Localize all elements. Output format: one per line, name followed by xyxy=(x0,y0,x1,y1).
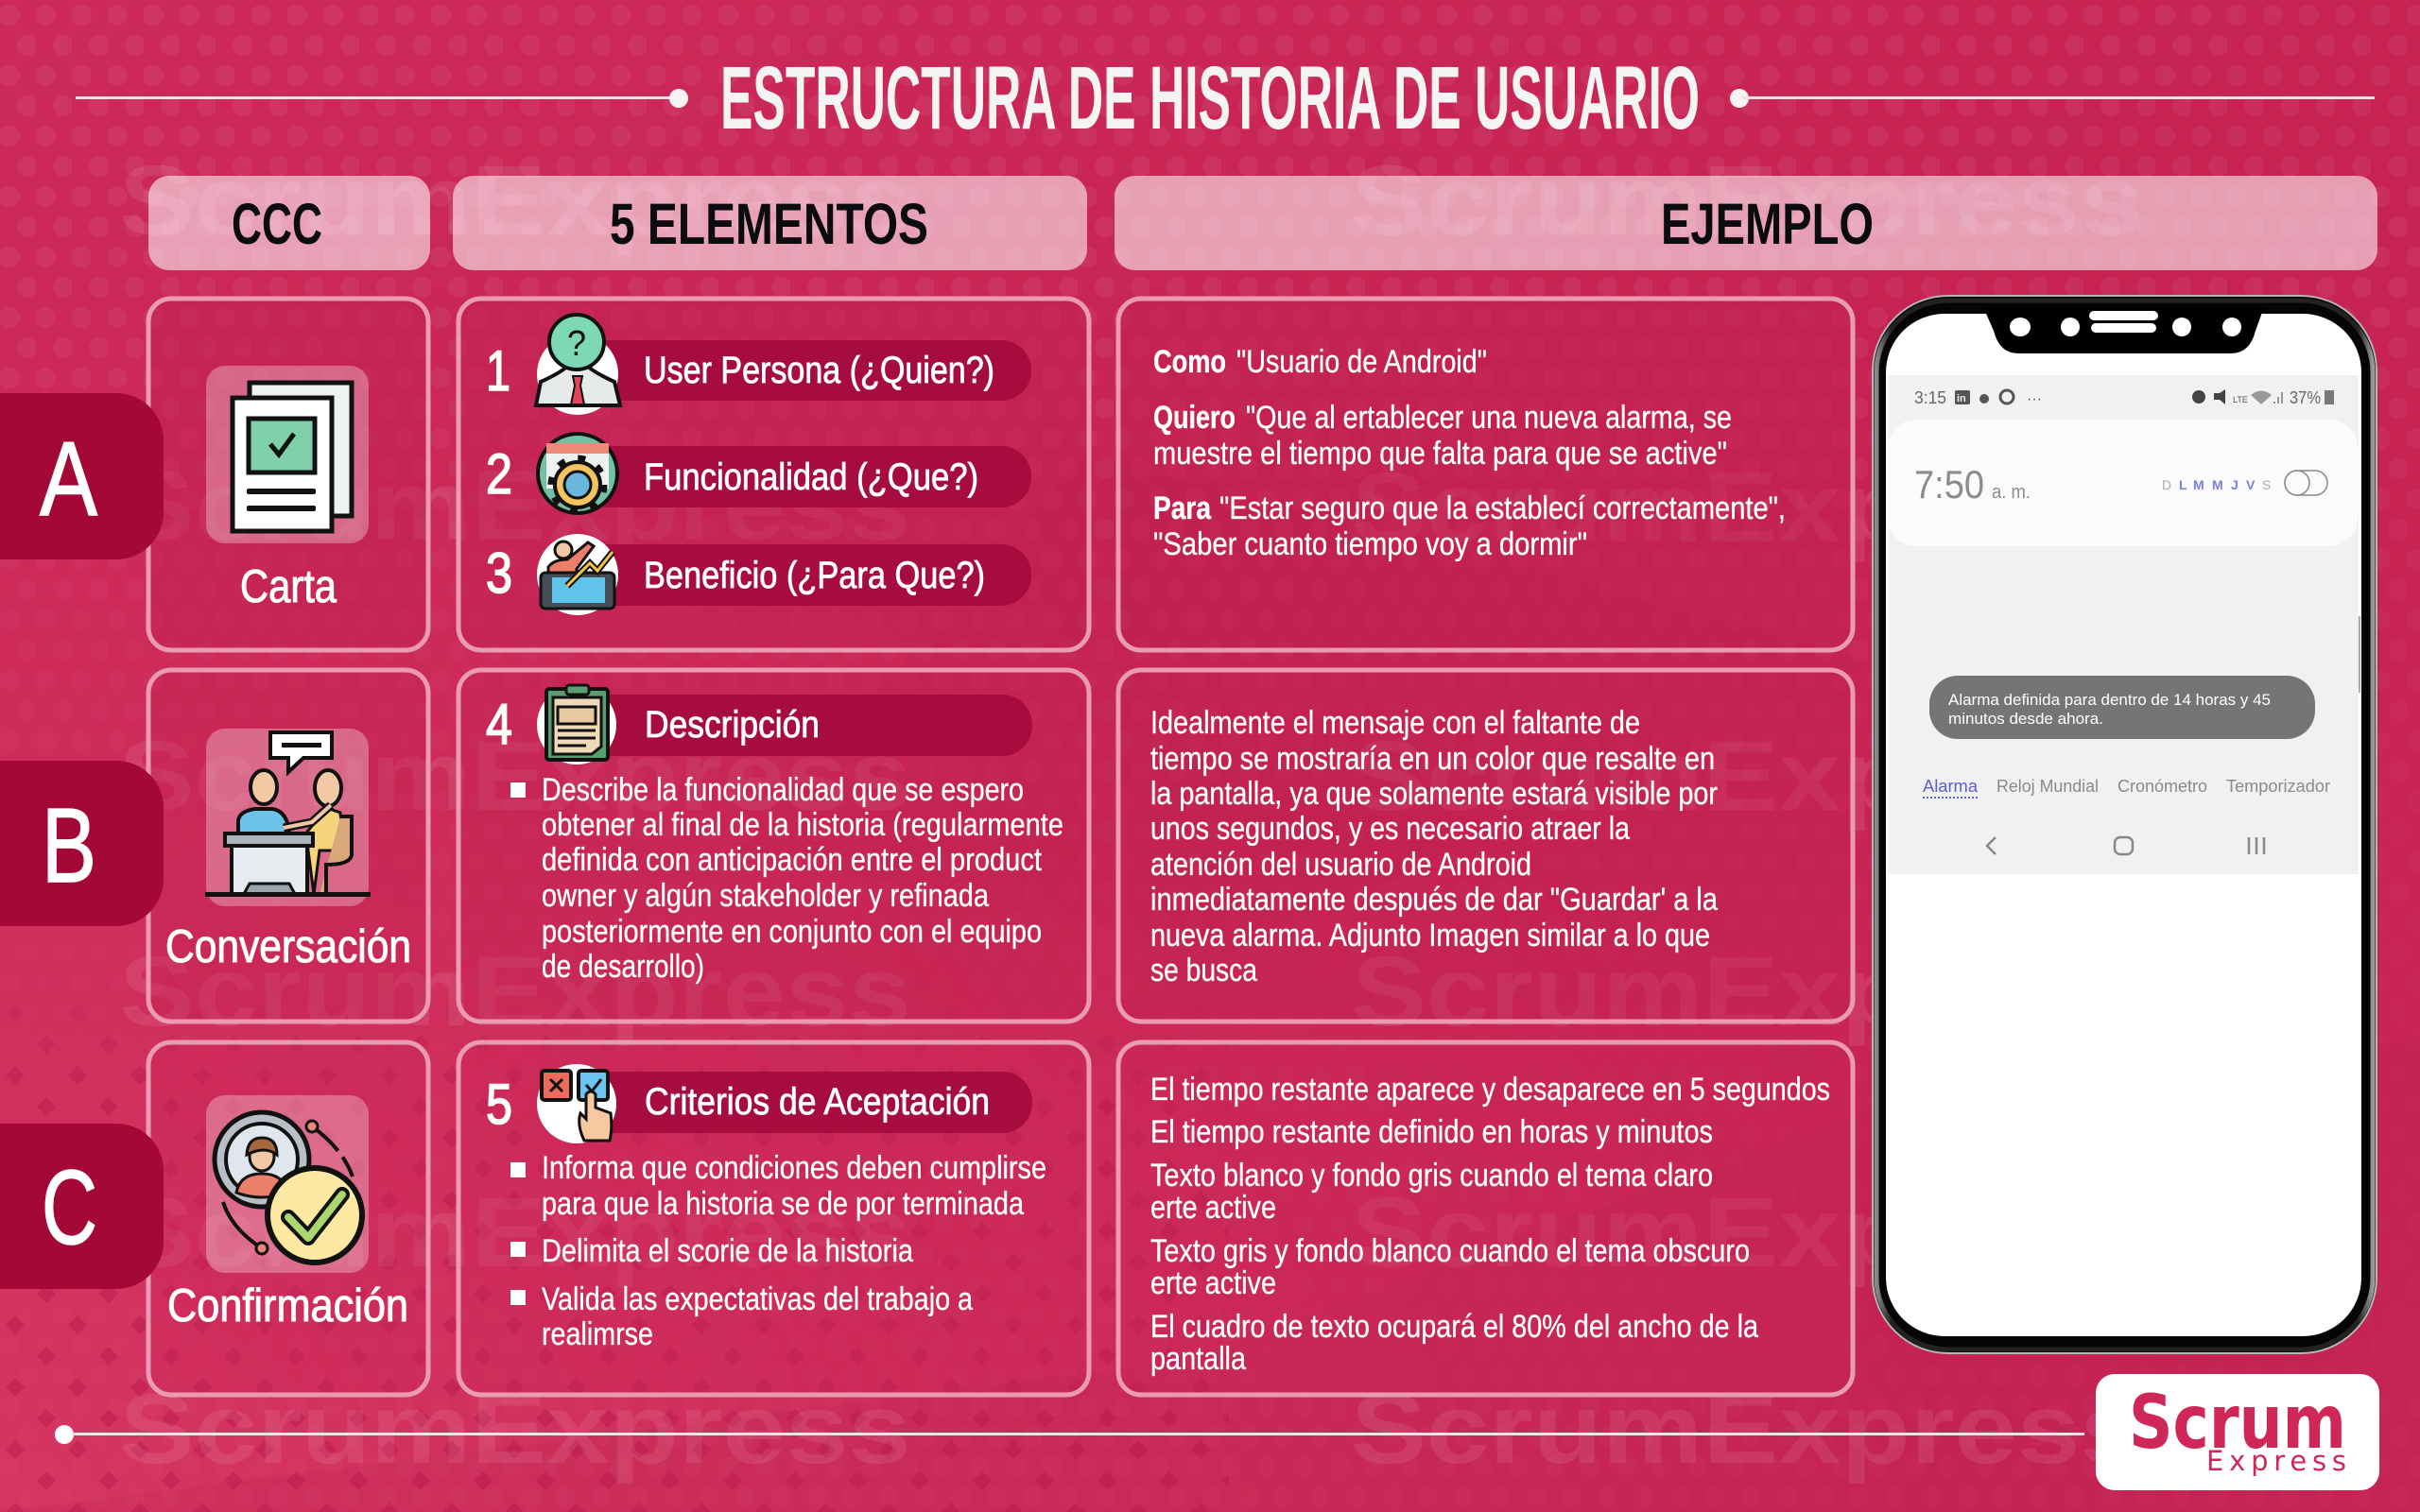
panel: Confirmacion xyxy=(148,1042,428,1395)
panel: elemento 5 criterios xyxy=(458,1042,1089,1395)
status bar: ··· xyxy=(2027,391,2042,407)
watermark text: ScrumExpress xyxy=(119,1177,911,1288)
clock tabs: Reloj Mundial xyxy=(1996,777,2099,796)
watermark text: ScrumExpress xyxy=(119,721,911,832)
element 3 beneficio: Beneficio (¿Para Que?) xyxy=(644,555,985,596)
watermark text: ScrumExpress xyxy=(119,451,911,561)
clock tabs: Temporizador xyxy=(2226,777,2330,796)
panel: elemento 4 descripcion xyxy=(458,670,1089,1022)
element 2 funcionalidad: Funcionalidad (¿Que?) xyxy=(644,456,978,498)
panel: elementos 1-3 xyxy=(458,299,1089,650)
alarm card: M xyxy=(2212,477,2223,492)
panel: ejemplo historia xyxy=(1118,299,1853,650)
element 4 description text: definida con anticipación entre el product xyxy=(542,842,1042,878)
alarm card: S xyxy=(2262,477,2271,492)
panel: ejemplo criterios: Texto blanco y fondo gris cuando el tema claro xyxy=(1150,1158,1713,1194)
alarm card xyxy=(1888,420,2358,546)
header: CCC: CCC xyxy=(232,192,322,256)
panel: ejemplo criterios: El tiempo restante definido en horas y minutos xyxy=(1150,1114,1713,1150)
element 2 funcionalidad: 2 xyxy=(486,442,512,506)
panel: ejemplo descripcion: nueva alarma. Adjunto Imagen similar a lo que xyxy=(1150,918,1710,954)
panel: ejemplo criterios: erte active xyxy=(1150,1190,1276,1226)
status bar xyxy=(1914,388,2334,407)
element 4 description text: Describe la funcionalidad que se espero xyxy=(542,772,1024,808)
watermark text: ScrumExpress xyxy=(119,146,911,256)
element 4 heading: Descripción xyxy=(645,704,820,746)
element 4 heading xyxy=(486,685,1032,765)
watermark text: ScrumExpress xyxy=(1351,721,2143,832)
logo: Scrum Express: Express xyxy=(2206,1445,2346,1477)
watermark text: ScrumExpress xyxy=(119,936,911,1047)
panel: ejemplo criterios: pantalla xyxy=(1150,1341,1246,1377)
watermark text: ScrumExpress xyxy=(1351,146,2143,256)
element 5 heading: 5 xyxy=(486,1073,512,1136)
element 1 user persona: ? xyxy=(567,324,586,364)
panel: ejemplo historia: "Saber cuanto tiempo voy a dormir" xyxy=(1153,526,1587,562)
element 2 funcionalidad xyxy=(486,434,1031,513)
watermark text: ScrumExpress xyxy=(1351,1374,2143,1485)
nav buttons xyxy=(1987,837,2264,854)
status bar: 37% xyxy=(2290,388,2321,407)
icon: confirmacion xyxy=(206,1095,369,1273)
header: ejemplo: EJEMPLO xyxy=(1661,192,1874,256)
element 5 bullets: para que la historia se de por terminada xyxy=(542,1186,1024,1222)
element 1 user persona xyxy=(486,315,1031,415)
panel: ejemplo criterios: Texto gris y fondo blanco cuando el tema obscuro xyxy=(1150,1233,1750,1269)
alarm card: 7:50 xyxy=(1914,462,1984,507)
side tab C xyxy=(0,1124,164,1289)
icon: carta xyxy=(206,366,369,543)
side tab A xyxy=(0,393,164,559)
phone notch xyxy=(1983,307,2264,353)
panel: ejemplo historia: Quiero xyxy=(1153,400,1236,436)
panel: ejemplo descripcion xyxy=(1118,670,1853,1022)
label: Carta: Carta xyxy=(240,561,337,612)
element 3 beneficio: 3 xyxy=(486,541,512,605)
element 5 bullets: Informa que condiciones deben cumplirse xyxy=(542,1150,1046,1186)
alarm card: M xyxy=(2193,477,2204,492)
watermark text: ScrumExpress xyxy=(1351,936,2143,1047)
status bar: 3:15 xyxy=(1914,388,1946,407)
status bar: LTE xyxy=(2233,395,2248,404)
icon: conversacion xyxy=(205,729,371,906)
phone screenshot xyxy=(1888,375,2360,874)
panel: ejemplo criterios: El tiempo restante aparece y desaparece en 5 segundos xyxy=(1150,1072,1830,1108)
element 4 heading: 4 xyxy=(486,693,512,756)
element 5 heading xyxy=(486,1064,1032,1143)
panel: ejemplo historia: Para xyxy=(1153,490,1212,526)
side tab B: B xyxy=(42,787,96,904)
watermark text xyxy=(119,146,2143,1485)
watermark text: ScrumExpress xyxy=(1351,453,2143,563)
header: ejemplo xyxy=(1115,176,2377,270)
toast message: Alarma definida para dentro de 14 horas y 45 xyxy=(1948,691,2271,709)
panel: ejemplo descripcion: se busca xyxy=(1150,953,1257,988)
alarm card: L xyxy=(2179,477,2187,492)
panel: ejemplo descripcion: Idealmente el mensaje con el faltante de xyxy=(1150,705,1640,741)
panel: ejemplo descripcion: atención del usuario de Android xyxy=(1150,847,1531,883)
panel: ejemplo historia: muestre el tiempo que falta para que se active" xyxy=(1153,436,1727,472)
panel: ejemplo criterios xyxy=(1118,1042,1853,1395)
clock tabs xyxy=(1923,777,2330,798)
panel: ejemplo historia: "Que al ertablecer una nueva alarma, se xyxy=(1246,400,1732,436)
header: CCC xyxy=(148,176,430,270)
alarm card: a. m. xyxy=(1992,482,2031,503)
clock tabs: Cronómetro xyxy=(2118,777,2207,796)
element 1 user persona: 1 xyxy=(486,339,510,403)
alarm card: D xyxy=(2162,477,2171,492)
header: 5 elementos xyxy=(453,176,1087,270)
watermark text: ScrumExpress xyxy=(1351,1177,2143,1288)
panel: ejemplo descripcion: inmediatamente después de dar "Guardar' a la xyxy=(1150,882,1718,918)
alarm card: V xyxy=(2246,477,2256,492)
clock tabs: Alarma xyxy=(1923,777,1979,796)
element 4 description text: obtener al final de la historia (regularmente xyxy=(542,807,1063,843)
element 5 bullets: Valida las expectativas del trabajo a xyxy=(542,1281,973,1317)
watermark text: ScrumExpress xyxy=(119,1374,911,1485)
element 5 bullets xyxy=(510,1150,1046,1352)
element 5 bullets: realimrse xyxy=(542,1316,653,1352)
header: 5 elementos: 5 ELEMENTOS xyxy=(610,192,928,256)
toast message xyxy=(1929,676,2315,739)
panel: Conversacion xyxy=(148,670,428,1022)
panel: ejemplo descripcion: tiempo se mostraría en un color que resalte en xyxy=(1150,741,1715,777)
logo: Scrum Express: Scrum xyxy=(2129,1381,2346,1466)
side tab B xyxy=(0,761,164,926)
side tab C: C xyxy=(42,1149,97,1266)
label: Confirmacion: Confirmación xyxy=(167,1280,408,1332)
element 5 bullets: Delimita el scorie de la historia xyxy=(542,1233,913,1269)
element 3 beneficio xyxy=(486,534,1031,615)
panel: ejemplo historia: "Estar seguro que la establecí correctamente", xyxy=(1219,490,1786,526)
footer line xyxy=(55,1425,2084,1444)
element 4 description text xyxy=(510,772,1063,985)
phone mockup xyxy=(1873,296,2377,1353)
logo: Scrum Express xyxy=(2096,1374,2379,1490)
element 4 description text: owner y algún stakeholder y refinada xyxy=(542,878,989,914)
element 4 description text: posteriormente en conjunto con el equipo xyxy=(542,914,1042,950)
panel: ejemplo historia: "Usuario de Android" xyxy=(1236,344,1487,380)
label: Conversacion: Conversación xyxy=(165,921,411,972)
toast message: minutos desde ahora. xyxy=(1948,710,2103,728)
panel: ejemplo historia: Como xyxy=(1153,344,1226,380)
panel: Carta xyxy=(148,299,428,650)
panel: ejemplo descripcion: la pantalla, ya que solamente estará visible por xyxy=(1150,776,1718,812)
panel: ejemplo descripcion: unos segundos, y es necesario atraer la xyxy=(1150,811,1630,847)
panel: ejemplo criterios: El cuadro de texto ocupará el 80% del ancho de la xyxy=(1150,1309,1758,1345)
status bar: in xyxy=(1957,393,1966,404)
panel: ejemplo criterios: erte active xyxy=(1150,1265,1276,1301)
element 5 heading: Criterios de Aceptación xyxy=(645,1081,990,1123)
alarm card: J xyxy=(2231,477,2238,492)
element 4 description text: de desarrollo) xyxy=(542,949,704,985)
side tab A: A xyxy=(40,421,97,538)
element 1 user persona: User Persona (¿Quien?) xyxy=(644,350,994,391)
